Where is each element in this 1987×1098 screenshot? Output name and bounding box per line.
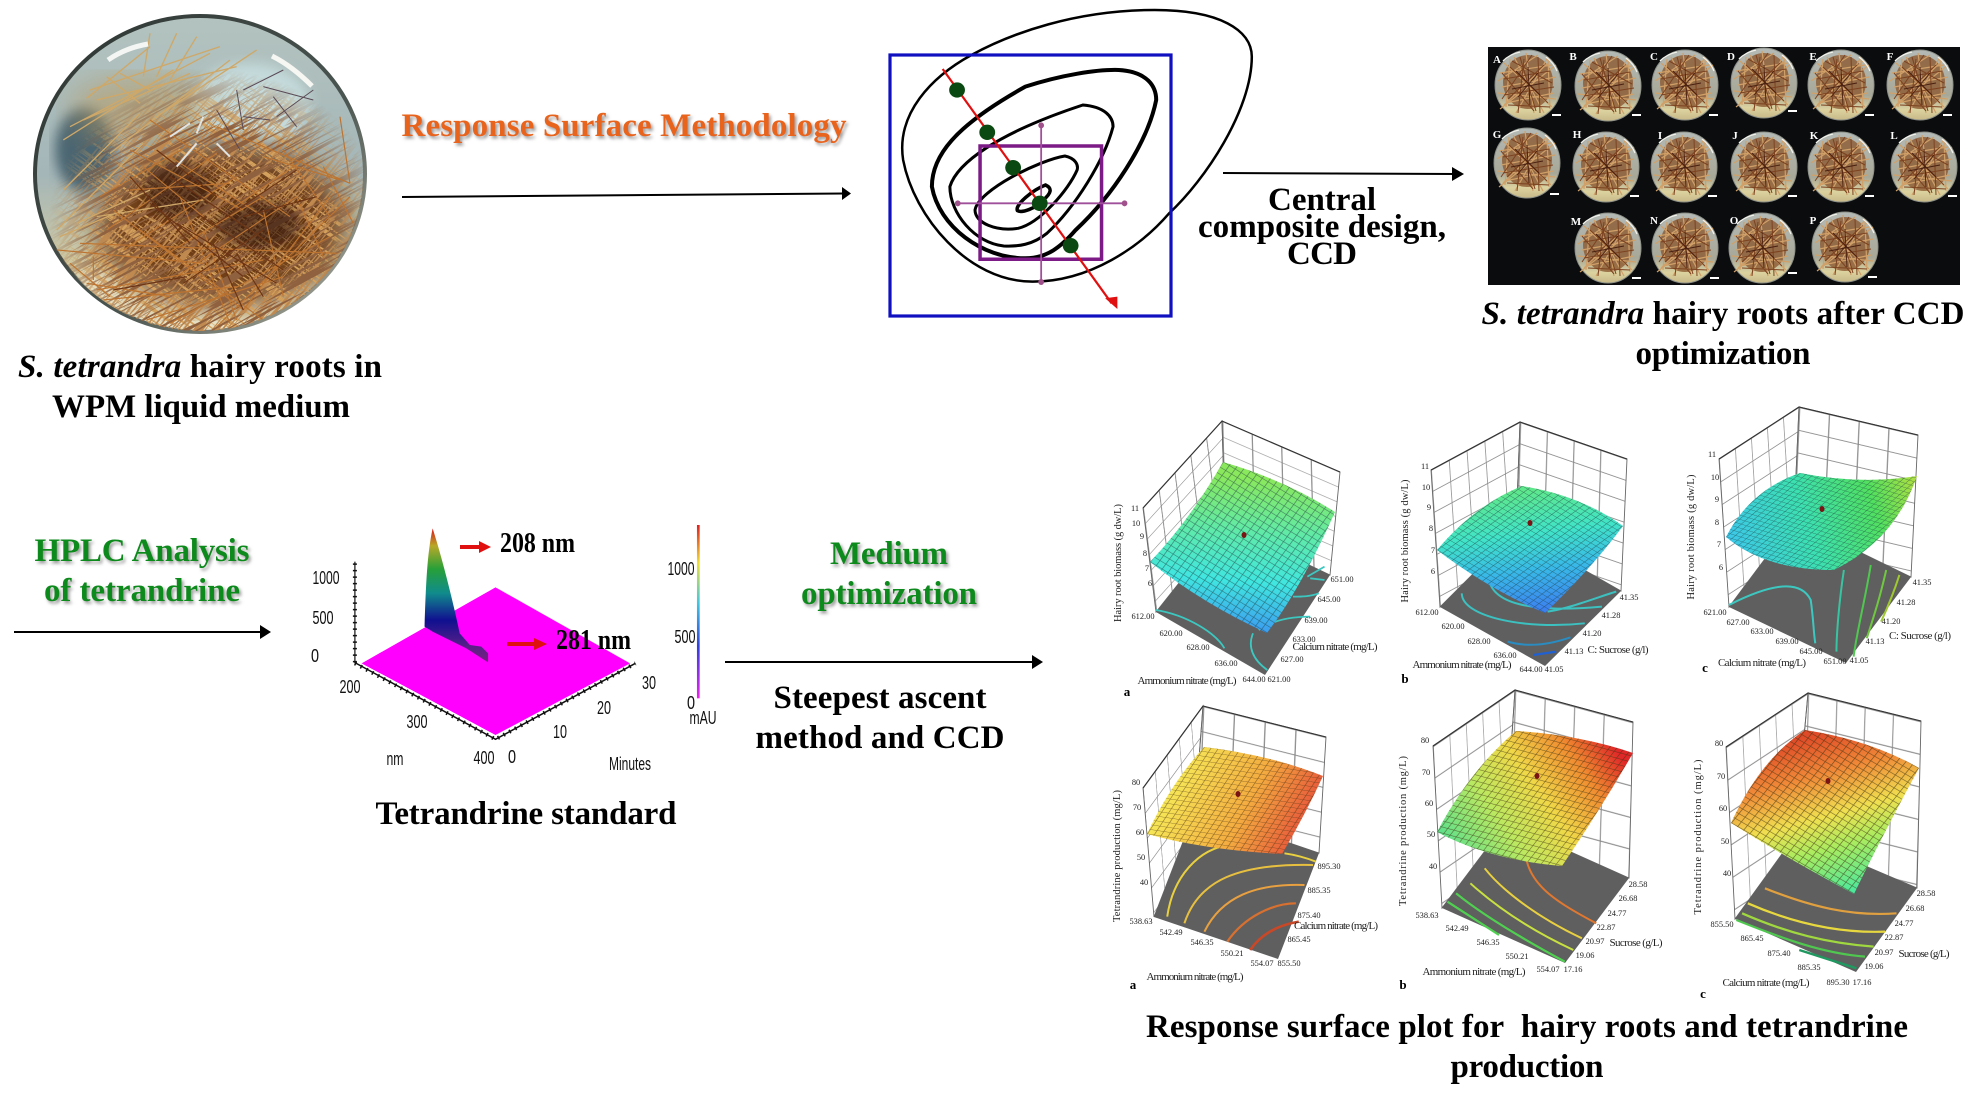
- chart: tetrandrine b: 550.21: [1505, 952, 1529, 961]
- chart: tetrandrine a: Ammonium nitrate (mg/L): [1146, 971, 1244, 983]
- chart: tetrandrine a: 70: [1133, 803, 1141, 812]
- chart: biomass b: 644.00: [1519, 665, 1543, 674]
- chart: biomass c: 645.00: [1799, 647, 1823, 656]
- chart: biomass a: Ammonium nitrate (mg/L): [1138, 675, 1237, 687]
- chart: tetrandrine b: 546.35: [1476, 938, 1500, 947]
- chart: biomass a: a: [1124, 684, 1131, 699]
- chart: tetrandrine c: 20.97: [1875, 948, 1893, 957]
- chart: biomass a: 11: [1131, 504, 1139, 513]
- chart: tetrandrine c: c: [1700, 986, 1706, 1001]
- chart: biomass c: 633.00: [1750, 627, 1774, 636]
- diagram: steepest ascent contour plot: [890, 10, 1252, 316]
- chart: tetrandrine 3D chromatogram: 500: [674, 627, 696, 647]
- heading: HPLC analysis: [34, 533, 250, 609]
- chart: tetrandrine b: 70: [1422, 768, 1430, 777]
- chart: tetrandrine 3D chromatogram: nm: [386, 749, 404, 769]
- panel: CCD hairy root photos: G: [1493, 129, 1502, 141]
- chart: biomass c: Calcium nitrate (mg/L): [1718, 657, 1806, 669]
- panel: CCD hairy root photos: K: [1810, 130, 1819, 142]
- chart: tetrandrine b: 17.16: [1564, 965, 1582, 974]
- callout: 208 nm: [460, 527, 575, 559]
- heading: medium optimization: [801, 536, 977, 612]
- panel: CCD hairy root photos: B: [1569, 51, 1577, 63]
- chart: biomass a: 645.00: [1317, 595, 1341, 604]
- chart: tetrandrine a: 546.35: [1190, 938, 1214, 947]
- panel: CCD hairy root photos: P: [1810, 215, 1817, 227]
- chart: biomass c: 41.05: [1850, 656, 1868, 665]
- chart: tetrandrine c: 22.87: [1885, 933, 1903, 942]
- label: steepest ascent method: method and CCD: [756, 720, 1004, 756]
- chart: biomass a: 10: [1132, 519, 1140, 528]
- heading: Response Surface Methodology: Response Surface Methodology: [402, 108, 847, 144]
- chart: tetrandrine 3D chromatogram: 300: [406, 712, 428, 732]
- chart: biomass a: [1113, 421, 1378, 699]
- chart: biomass c: 9: [1715, 495, 1719, 504]
- chart: biomass b: 9: [1427, 503, 1431, 512]
- chart: tetrandrine b: b: [1399, 977, 1407, 992]
- chart: tetrandrine 3D chromatogram: 500: [312, 608, 334, 628]
- panel: CCD hairy root photos: O: [1730, 215, 1739, 227]
- panel: CCD hairy root photos: [1488, 47, 1960, 285]
- caption: response surface plot: Response surface plot for hairy roots and tetrandrine: [1146, 1009, 1908, 1045]
- chart: tetrandrine b: 554.07: [1536, 965, 1560, 974]
- chart: biomass b: 41.28: [1602, 611, 1620, 620]
- chart: biomass c: C: Sucrose (g/l): [1889, 630, 1951, 642]
- caption: roots after CCD optimization: S. tetrandra hairy roots after CCD: [1482, 296, 1964, 332]
- chart: biomass c: [1686, 407, 1951, 675]
- chart: biomass b: 41.20: [1583, 629, 1601, 638]
- caption: hairy roots in WPM: WPM liquid medium: [52, 389, 350, 425]
- chart: tetrandrine b: 40: [1429, 862, 1437, 871]
- chart: tetrandrine b: 22.87: [1597, 923, 1615, 932]
- panel: CCD hairy root photos: C: [1650, 51, 1658, 63]
- chart: biomass b: 620.00: [1441, 622, 1465, 631]
- chart: tetrandrine a: 60: [1136, 828, 1144, 837]
- chart: tetrandrine a: 40: [1140, 878, 1148, 887]
- chart: biomass b: 41.35: [1620, 593, 1638, 602]
- chart: biomass c: 627.00: [1726, 618, 1750, 627]
- chart: biomass a: 6: [1148, 579, 1152, 588]
- chart: tetrandrine c: 50: [1721, 837, 1729, 846]
- chart: biomass b: [1400, 422, 1649, 686]
- chart: tetrandrine a: 550.21: [1220, 949, 1244, 958]
- chart: biomass b: Hairy root biomass (g dw/L): [1400, 479, 1411, 602]
- chart: tetrandrine c: 26.68: [1906, 904, 1924, 913]
- chart: tetrandrine 3D chromatogram: 1000: [668, 559, 694, 579]
- chart: tetrandrine 3D chromatogram: 20: [597, 698, 611, 718]
- chart: biomass c: Hairy root biomass (g dw/L): [1686, 474, 1697, 600]
- chart: tetrandrine b: Sucrose (g/L): [1610, 937, 1663, 949]
- chart: biomass b: 6: [1431, 567, 1435, 576]
- chart: biomass a: 7: [1145, 564, 1149, 573]
- chart: biomass a: 9: [1140, 532, 1144, 541]
- chart: biomass c: 41.20: [1882, 617, 1900, 626]
- chart: biomass c: 10: [1711, 473, 1719, 482]
- chart: tetrandrine c: 80: [1715, 739, 1723, 748]
- chart: tetrandrine a: 895.30: [1317, 862, 1341, 871]
- chart: biomass c: 7: [1717, 540, 1721, 549]
- chart: biomass b: 41.05: [1545, 665, 1563, 674]
- chart: tetrandrine a: 542.49: [1159, 928, 1183, 937]
- panel: CCD hairy root photos: I: [1658, 130, 1662, 142]
- chart: tetrandrine c: 17.16: [1853, 978, 1871, 987]
- chart: tetrandrine c: 865.45: [1740, 934, 1764, 943]
- chart: tetrandrine c: 19.06: [1865, 962, 1883, 971]
- panel: CCD hairy root photos: H: [1573, 129, 1582, 141]
- heading: HPLC analysis: HPLC Analysis: [34, 533, 250, 569]
- panel: CCD hairy root photos: L: [1890, 130, 1898, 142]
- chart: tetrandrine 3D chromatogram: mAU: [690, 708, 716, 728]
- chart: tetrandrine a: 50: [1137, 853, 1145, 862]
- chart: tetrandrine b: 28.58: [1629, 880, 1647, 889]
- chart: biomass a: 636.00: [1214, 659, 1238, 668]
- chart: tetrandrine a: Calcium nitrate (mg/L): [1294, 920, 1378, 932]
- chart: biomass c: 6: [1719, 563, 1723, 572]
- label: central composite design: Central: [1268, 182, 1376, 218]
- chart: biomass c: c: [1702, 660, 1708, 675]
- chart: tetrandrine c: 895.30: [1826, 978, 1850, 987]
- chart: biomass c: 639.00: [1775, 637, 1799, 646]
- caption: response surface plot: [1146, 1009, 1908, 1085]
- chart: tetrandrine a: 865.45: [1287, 935, 1311, 944]
- chart: biomass b: 636.00: [1493, 651, 1517, 660]
- chart: tetrandrine 3D chromatogram: 10: [553, 722, 567, 742]
- chart: tetrandrine 3D chromatogram: 200: [340, 677, 360, 697]
- chart: biomass b: 41.13: [1565, 647, 1583, 656]
- heading: HPLC analysis: of tetrandrine: [44, 573, 240, 609]
- chart: tetrandrine b: 19.06: [1576, 951, 1594, 960]
- chart: biomass c: 41.13: [1866, 637, 1884, 646]
- arrow: to contour diagram: [402, 187, 851, 200]
- caption: roots after CCD optimization: [1482, 296, 1964, 372]
- chart: tetrandrine b: 26.68: [1619, 894, 1637, 903]
- chart: biomass b: 10: [1422, 483, 1430, 492]
- chart: biomass b: 7: [1431, 546, 1435, 555]
- chart: tetrandrine b: 80: [1421, 736, 1429, 745]
- chart: tetrandrine c: Calcium nitrate (mg/L): [1722, 977, 1810, 989]
- chart: tetrandrine a: 554.07: [1250, 959, 1274, 968]
- panel: CCD hairy root photos: J: [1732, 130, 1738, 142]
- chart: biomass b: b: [1401, 671, 1409, 686]
- chart: tetrandrine 3D chromatogram: 0: [687, 693, 695, 713]
- photo: hairy roots in dish: [33, 14, 367, 334]
- chart: tetrandrine 3D chromatogram: Minutes: [609, 754, 651, 774]
- arrow: to chromatogram: [14, 625, 271, 639]
- chart: tetrandrine a: Tetrandrine production (mg/L): [1112, 790, 1123, 922]
- chart: tetrandrine c: 40: [1723, 869, 1731, 878]
- label: steepest ascent method: [756, 680, 1004, 756]
- chart: tetrandrine b: [1398, 690, 1663, 992]
- chart: biomass a: 651.00: [1330, 575, 1354, 584]
- chart: tetrandrine b: 24.77: [1608, 909, 1626, 918]
- label: central composite design: CCD: [1287, 236, 1357, 272]
- panel: CCD hairy root photos: D: [1727, 51, 1735, 63]
- panel: CCD hairy root photos: E: [1809, 51, 1817, 63]
- panel: CCD hairy root photos: F: [1887, 51, 1894, 63]
- chart: tetrandrine c: 60: [1719, 804, 1727, 813]
- label: steepest ascent method: Steepest ascent: [774, 680, 986, 716]
- chart: tetrandrine c: [1693, 693, 1950, 1001]
- chart: tetrandrine b: Ammonium nitrate (mg/L): [1422, 966, 1526, 978]
- chart: biomass a: Calcium nitrate (mg/L): [1292, 641, 1378, 653]
- chart: biomass c: 41.35: [1913, 578, 1931, 587]
- chart: tetrandrine c: 28.58: [1917, 889, 1935, 898]
- chart: tetrandrine a: 538.63: [1129, 917, 1153, 926]
- chart: tetrandrine a: a: [1130, 977, 1137, 992]
- chart: biomass a: 621.00: [1267, 675, 1291, 684]
- chart: tetrandrine c: 24.77: [1895, 919, 1913, 928]
- caption: hairy roots in WPM: S. tetrandra hairy roots in: [18, 349, 382, 385]
- chart: tetrandrine a: [1112, 706, 1378, 992]
- arrow: to CCD photos: [1223, 167, 1464, 181]
- panel: CCD hairy root photos: A: [1493, 54, 1501, 66]
- chart: biomass a: 627.00: [1280, 655, 1304, 664]
- callout: 281 nm: [507, 624, 631, 656]
- chart: tetrandrine c: 855.50: [1710, 920, 1734, 929]
- chart: tetrandrine b: 50: [1427, 830, 1435, 839]
- heading: medium optimization: optimization: [801, 576, 977, 612]
- chart: tetrandrine 3D chromatogram: 400: [474, 748, 494, 768]
- chart: biomass a: 644.00: [1242, 675, 1266, 684]
- chart: biomass b: 8: [1429, 524, 1433, 533]
- chart: tetrandrine a: 885.35: [1307, 886, 1331, 895]
- chart: biomass a: 639.00: [1304, 616, 1328, 625]
- chart: biomass b: 11: [1421, 462, 1429, 471]
- chart: biomass a: 628.00: [1186, 643, 1210, 652]
- chart: tetrandrine c: Sucrose (g/L): [1898, 948, 1950, 960]
- chart: biomass c: 11: [1708, 450, 1716, 459]
- caption: response surface plot: production: [1450, 1049, 1604, 1085]
- callout: 208 nm: 208 nm: [500, 527, 575, 559]
- chart: tetrandrine b: Tetrandrine production (mg/L): [1398, 756, 1409, 906]
- chart: tetrandrine 3D chromatogram: 0: [508, 747, 516, 767]
- chart: tetrandrine c: 885.35: [1797, 963, 1821, 972]
- chart: biomass b: 628.00: [1467, 637, 1491, 646]
- caption: roots after CCD optimization: optimization: [1636, 336, 1810, 372]
- panel: CCD hairy root photos: M: [1571, 216, 1582, 228]
- caption: hairy roots in WPM: [18, 349, 382, 425]
- heading: medium optimization: Medium: [830, 536, 948, 572]
- chart: tetrandrine a: 80: [1132, 778, 1140, 787]
- chart: tetrandrine 3D chromatogram: [311, 525, 716, 774]
- chart: tetrandrine a: 875.40: [1297, 911, 1321, 920]
- chart: tetrandrine c: 875.40: [1767, 949, 1791, 958]
- label: central composite design: [1198, 182, 1446, 272]
- chart: tetrandrine 3D chromatogram: 0: [311, 646, 319, 666]
- chart: tetrandrine 3D chromatogram: 30: [642, 673, 656, 693]
- caption: tetrandrine standard: Tetrandrine standard: [376, 796, 676, 832]
- chart: biomass b: C: Sucrose (g/l): [1588, 644, 1649, 656]
- label: central composite design: composite design,: [1198, 209, 1446, 245]
- chart: tetrandrine b: 538.63: [1415, 911, 1439, 920]
- chart: tetrandrine c: Tetrandrine production (mg/L): [1693, 759, 1704, 914]
- chart: biomass a: 8: [1143, 549, 1147, 558]
- chart: biomass b: 612.00: [1415, 608, 1439, 617]
- chart: biomass c: 8: [1715, 518, 1719, 527]
- chart: tetrandrine b: 60: [1425, 799, 1433, 808]
- chart: biomass a: 612.00: [1131, 612, 1155, 621]
- chart: biomass c: 621.00: [1703, 608, 1727, 617]
- callout: 281 nm: 281 nm: [556, 624, 631, 656]
- chart: tetrandrine a: 855.50: [1277, 959, 1301, 968]
- chart: tetrandrine b: 542.49: [1445, 924, 1469, 933]
- chart: tetrandrine 3D chromatogram: 1000: [312, 568, 340, 588]
- chart: biomass a: 633.00: [1292, 635, 1316, 644]
- chart: biomass a: 620.00: [1159, 629, 1183, 638]
- chart: biomass c: 41.28: [1897, 598, 1915, 607]
- chart: biomass c: 651.00: [1823, 657, 1847, 666]
- chart: biomass b: Ammonium nitrate (mg/L): [1412, 659, 1512, 671]
- chart: tetrandrine c: 70: [1717, 772, 1725, 781]
- arrow: to response surfaces: [725, 655, 1043, 669]
- panel: CCD hairy root photos: N: [1650, 215, 1658, 227]
- chart: tetrandrine b: 20.97: [1586, 937, 1604, 946]
- chart: biomass a: Hairy root biomass (g dw/L): [1113, 504, 1124, 622]
